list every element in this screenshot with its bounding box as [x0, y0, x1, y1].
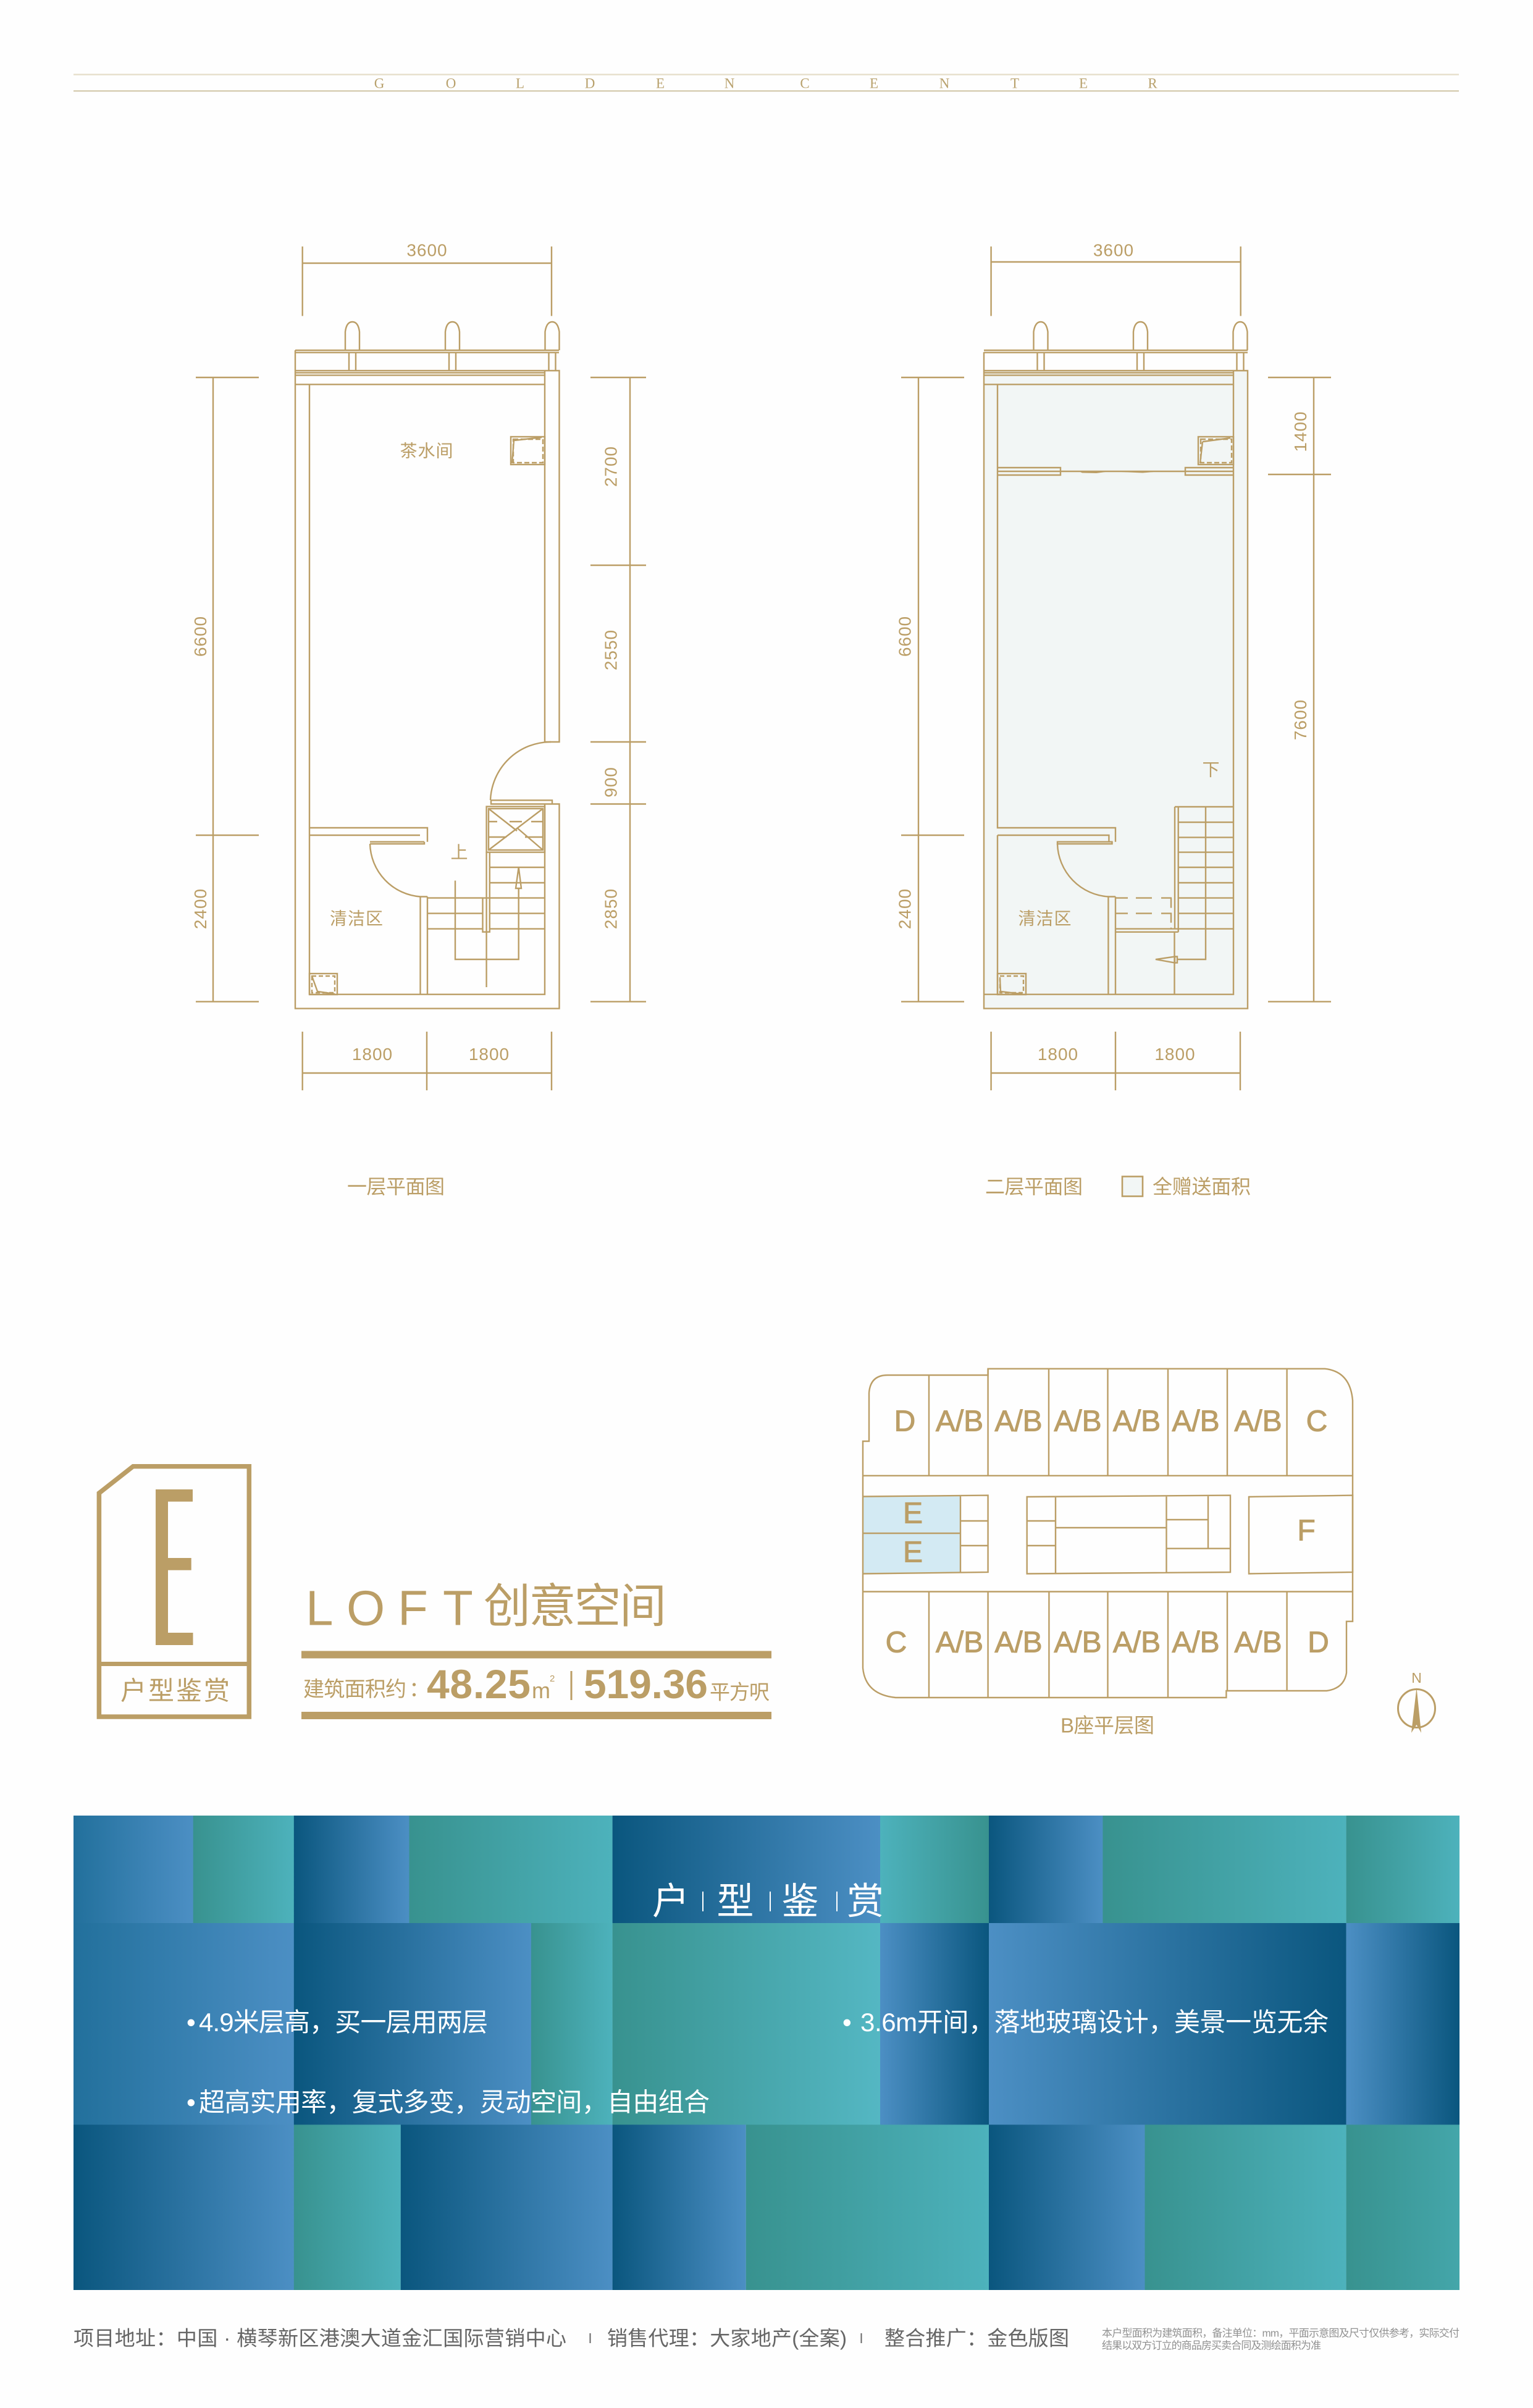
unit labels: A/B	[1113, 1405, 1161, 1438]
footer: disclaimer: 结果以双方订立的商品房买卖合同及测绘面积为准	[1102, 2340, 1321, 2351]
footer: project information	[74, 2326, 1069, 2350]
unit labels: A/B	[1234, 1626, 1282, 1659]
bullet: frontage: 3.6m开间，落地玻璃设计，美景一览无余	[860, 2008, 1329, 2037]
header: GOLDEN CENTER: E	[656, 75, 665, 91]
duct: lower	[998, 974, 1026, 995]
balcony posts: first floor	[345, 322, 560, 371]
header: GOLDEN CENTER: O	[446, 75, 456, 91]
unit labels: A/B	[1234, 1405, 1282, 1438]
panel: first floor plan	[191, 241, 646, 1090]
icon: north compass	[1398, 1670, 1435, 1733]
balcony posts: second floor	[1034, 322, 1248, 371]
area figures: 2	[550, 1673, 555, 1684]
caption: building B floor plan: B座平层图	[1060, 1714, 1154, 1737]
title: LOFT creative space: O	[346, 1580, 385, 1636]
duct: upper	[1198, 437, 1233, 465]
bullet: usage rate: 超高实用率，复式多变，灵动空间，自由组合	[199, 2088, 710, 2116]
title: LOFT creative space: F	[398, 1580, 428, 1636]
unit labels: D	[894, 1405, 915, 1438]
title: LOFT creative space	[306, 1580, 666, 1636]
bullet: ceiling height: 4.9米层高，买一层用两层	[199, 2008, 488, 2037]
room labels: second floor	[1018, 760, 1220, 928]
dimensions: first floor: 2850	[602, 888, 620, 929]
panel: colour-block feature band	[74, 1816, 1460, 2290]
room labels: second floor: 下	[1202, 760, 1220, 780]
unit labels: A/B	[1172, 1626, 1220, 1659]
header: GOLDEN CENTER: L	[516, 75, 524, 91]
legend: gifted area: 全赠送面积	[1153, 1176, 1251, 1198]
heading: second floor plan: 二层平面图	[985, 1176, 1083, 1198]
area figures: 48.25	[427, 1661, 531, 1707]
header: GOLDEN CENTER: D	[585, 75, 595, 91]
colour blocks: row 1	[74, 1816, 1460, 1923]
header: GOLDEN CENTER: E	[870, 75, 878, 91]
dimensions: second floor: 1800	[1038, 1045, 1078, 1064]
unit labels: D	[1308, 1626, 1329, 1659]
header: GOLDEN CENTER: N	[724, 75, 735, 91]
heading: unit appreciation: 鉴	[782, 1880, 819, 1922]
dimensions: second floor: 6600	[896, 616, 914, 657]
bullet: frontage: •	[842, 2008, 852, 2037]
unit labels: E	[903, 1536, 923, 1569]
footer: project information: 销售代理：大家地产(全案)	[607, 2326, 847, 2350]
gifted area fill	[984, 371, 1248, 1009]
footer: disclaimer: 本户型面积为建筑面积，备注单位：mm，平面示意图及尺寸仅供参考，实际交付	[1102, 2328, 1460, 2339]
letter E	[156, 1489, 193, 1645]
plan outline	[863, 1369, 1353, 1698]
heading: unit appreciation: 赏	[847, 1880, 884, 1922]
footer: project information: 整合推广：金色版图	[884, 2326, 1069, 2350]
heading: unit appreciation: 型	[716, 1880, 754, 1922]
footer: disclaimer	[1102, 2328, 1460, 2351]
bullet: ceiling height: •	[187, 2008, 196, 2037]
heading: unit appreciation: 户	[652, 1880, 689, 1922]
dimensions: second floor: 2400	[896, 888, 914, 929]
stairs: second floor	[1115, 807, 1233, 995]
duct: tea room	[511, 437, 545, 465]
unit labels: C	[886, 1626, 907, 1659]
dimensions: first floor: 3600	[406, 241, 448, 259]
room labels: first floor: 茶水间	[400, 441, 454, 461]
unit labels: F	[1297, 1515, 1316, 1547]
title: LOFT creative space: 创意空间	[484, 1580, 666, 1633]
badge: unit type E	[99, 1467, 250, 1717]
title: LOFT creative space: L	[306, 1580, 334, 1636]
badge: unit type E: 户型鉴赏	[120, 1677, 230, 1705]
header: GOLDEN CENTER	[74, 74, 1459, 91]
header: GOLDEN CENTER: T	[1010, 75, 1019, 91]
walls: second floor	[984, 350, 1248, 1009]
header: GOLDEN CENTER: N	[939, 75, 950, 91]
footer: project information: 项目地址：中国 · 横琴新区港澳大道金汇国际营销中心	[74, 2326, 566, 2350]
area figures: 平方呎	[710, 1680, 770, 1704]
walls: first floor	[295, 350, 560, 1009]
unit labels: A/B	[994, 1626, 1043, 1659]
room labels: first floor	[330, 441, 469, 928]
header: GOLDEN CENTER: E	[1079, 75, 1088, 91]
dimensions: second floor: 1800	[1154, 1045, 1196, 1064]
highlighted unit E	[863, 1496, 960, 1574]
dimensions: first floor: 1800	[352, 1045, 393, 1064]
unit labels	[886, 1405, 1329, 1659]
glass partition	[998, 468, 1233, 475]
room labels: first floor: 清洁区	[330, 909, 384, 928]
header: GOLDEN CENTER: G	[374, 75, 384, 91]
plan partitions	[863, 1369, 1353, 1698]
dimensions: second floor: 3600	[1093, 241, 1134, 259]
dimensions: second floor	[896, 241, 1331, 1090]
panel: second floor plan	[896, 241, 1331, 1090]
panel: floor key plan	[863, 1369, 1353, 1698]
title: LOFT creative space: T	[443, 1580, 473, 1636]
dimensions: first floor: 6600	[191, 616, 210, 657]
colour blocks: row 2	[74, 1923, 1460, 2125]
dimensions: first floor: 2400	[191, 888, 210, 929]
unit labels: A/B	[1172, 1405, 1220, 1438]
dimensions: first floor: 1800	[469, 1045, 510, 1064]
dimensions: first floor	[191, 241, 646, 1090]
unit labels: A/B	[1054, 1405, 1102, 1438]
icon: north compass: N	[1411, 1670, 1422, 1686]
unit labels: C	[1306, 1405, 1327, 1438]
area figures: ：	[409, 1678, 430, 1701]
room labels: first floor: 上	[450, 843, 469, 862]
unit labels: A/B	[994, 1405, 1043, 1438]
unit labels: A/B	[1054, 1626, 1102, 1659]
area figures: m	[532, 1678, 550, 1703]
duct: cleaning area	[309, 974, 337, 995]
colour blocks: row 3	[74, 2124, 1460, 2290]
dimensions: second floor: 1400	[1291, 411, 1310, 452]
area figures: 519.36	[584, 1661, 708, 1707]
elevator shaft and stairs: first floor	[427, 807, 545, 987]
header: GOLDEN CENTER: R	[1148, 75, 1157, 91]
heading: unit appreciation	[652, 1880, 884, 1922]
dimensions: first floor: 2550	[602, 629, 620, 670]
unit labels: A/B	[936, 1405, 983, 1438]
unit labels: A/B	[1113, 1626, 1161, 1659]
dimensions: first floor: 2700	[602, 446, 620, 487]
door swings: first floor	[370, 742, 551, 897]
dimensions: second floor: 7600	[1291, 699, 1310, 740]
unit labels: A/B	[936, 1626, 983, 1659]
dimensions: first floor: 900	[602, 767, 620, 798]
unit labels: E	[903, 1497, 923, 1530]
header: GOLDEN CENTER: C	[800, 75, 810, 91]
door swing: second floor	[1057, 844, 1109, 897]
area figures: 建筑面积约	[303, 1678, 406, 1701]
bullet: usage rate: •	[187, 2088, 196, 2116]
room labels: second floor: 清洁区	[1018, 909, 1072, 928]
heading: first floor plan: 一层平面图	[347, 1176, 445, 1198]
area figures	[301, 1651, 771, 1719]
